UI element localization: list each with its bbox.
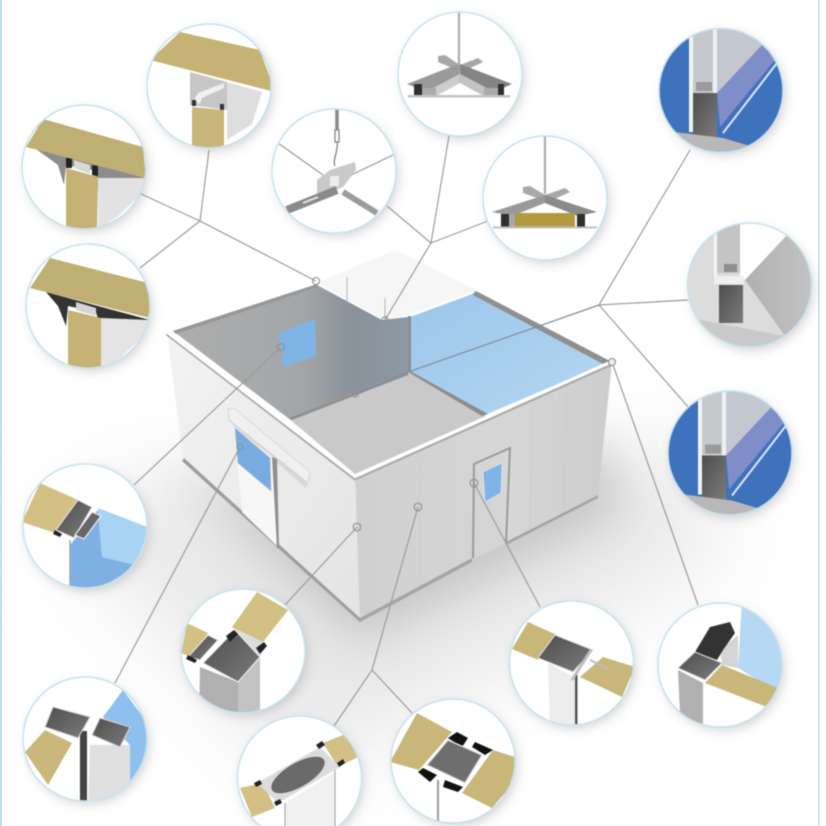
detail circle: blue floor channel lower — [668, 388, 799, 522]
detail circle: glass window joint — [22, 464, 150, 590]
interior floor — [288, 372, 486, 474]
leader anchor points — [237, 278, 616, 531]
white top rim — [167, 333, 612, 478]
suspension hangers — [347, 277, 385, 320]
detail circle: door frame with pin — [510, 601, 635, 727]
sliding door window — [235, 428, 271, 491]
detail circle: cross beam with panel — [483, 136, 607, 260]
interior back walls — [173, 285, 408, 418]
sliding door — [234, 427, 277, 546]
detail circle: outer corner post — [181, 589, 305, 715]
mineral wool panels — [150, 32, 275, 92]
detail circle: grey floor channel — [688, 222, 815, 350]
blue ceiling panels — [408, 293, 607, 415]
detail circle: square post between panels — [390, 699, 518, 823]
right outer wall — [355, 362, 612, 618]
white ceiling panel — [317, 250, 477, 320]
detail circle: glass corner frame — [658, 600, 790, 730]
ground shadow — [60, 440, 720, 780]
sliding door hood — [228, 408, 310, 488]
left outer wall — [167, 332, 360, 618]
detail circle: T junction — [22, 105, 146, 230]
swing door frame — [473, 448, 510, 558]
back top rim — [473, 291, 610, 365]
leader lines — [115, 136, 698, 726]
room model — [167, 250, 612, 622]
detail circle: cross beam — [398, 12, 522, 136]
back-wall window — [279, 319, 316, 367]
detail circle: T junction dark — [26, 244, 150, 368]
detail circle: wall to ceiling channel — [147, 24, 275, 150]
gold panel core — [515, 213, 575, 227]
detail circle: oval profile — [238, 716, 362, 826]
swing door window — [483, 463, 502, 502]
detail circle: ceiling hanger — [272, 109, 396, 233]
detail circle: blue floor channel top — [659, 25, 790, 160]
detail circle: double door post — [23, 677, 150, 803]
